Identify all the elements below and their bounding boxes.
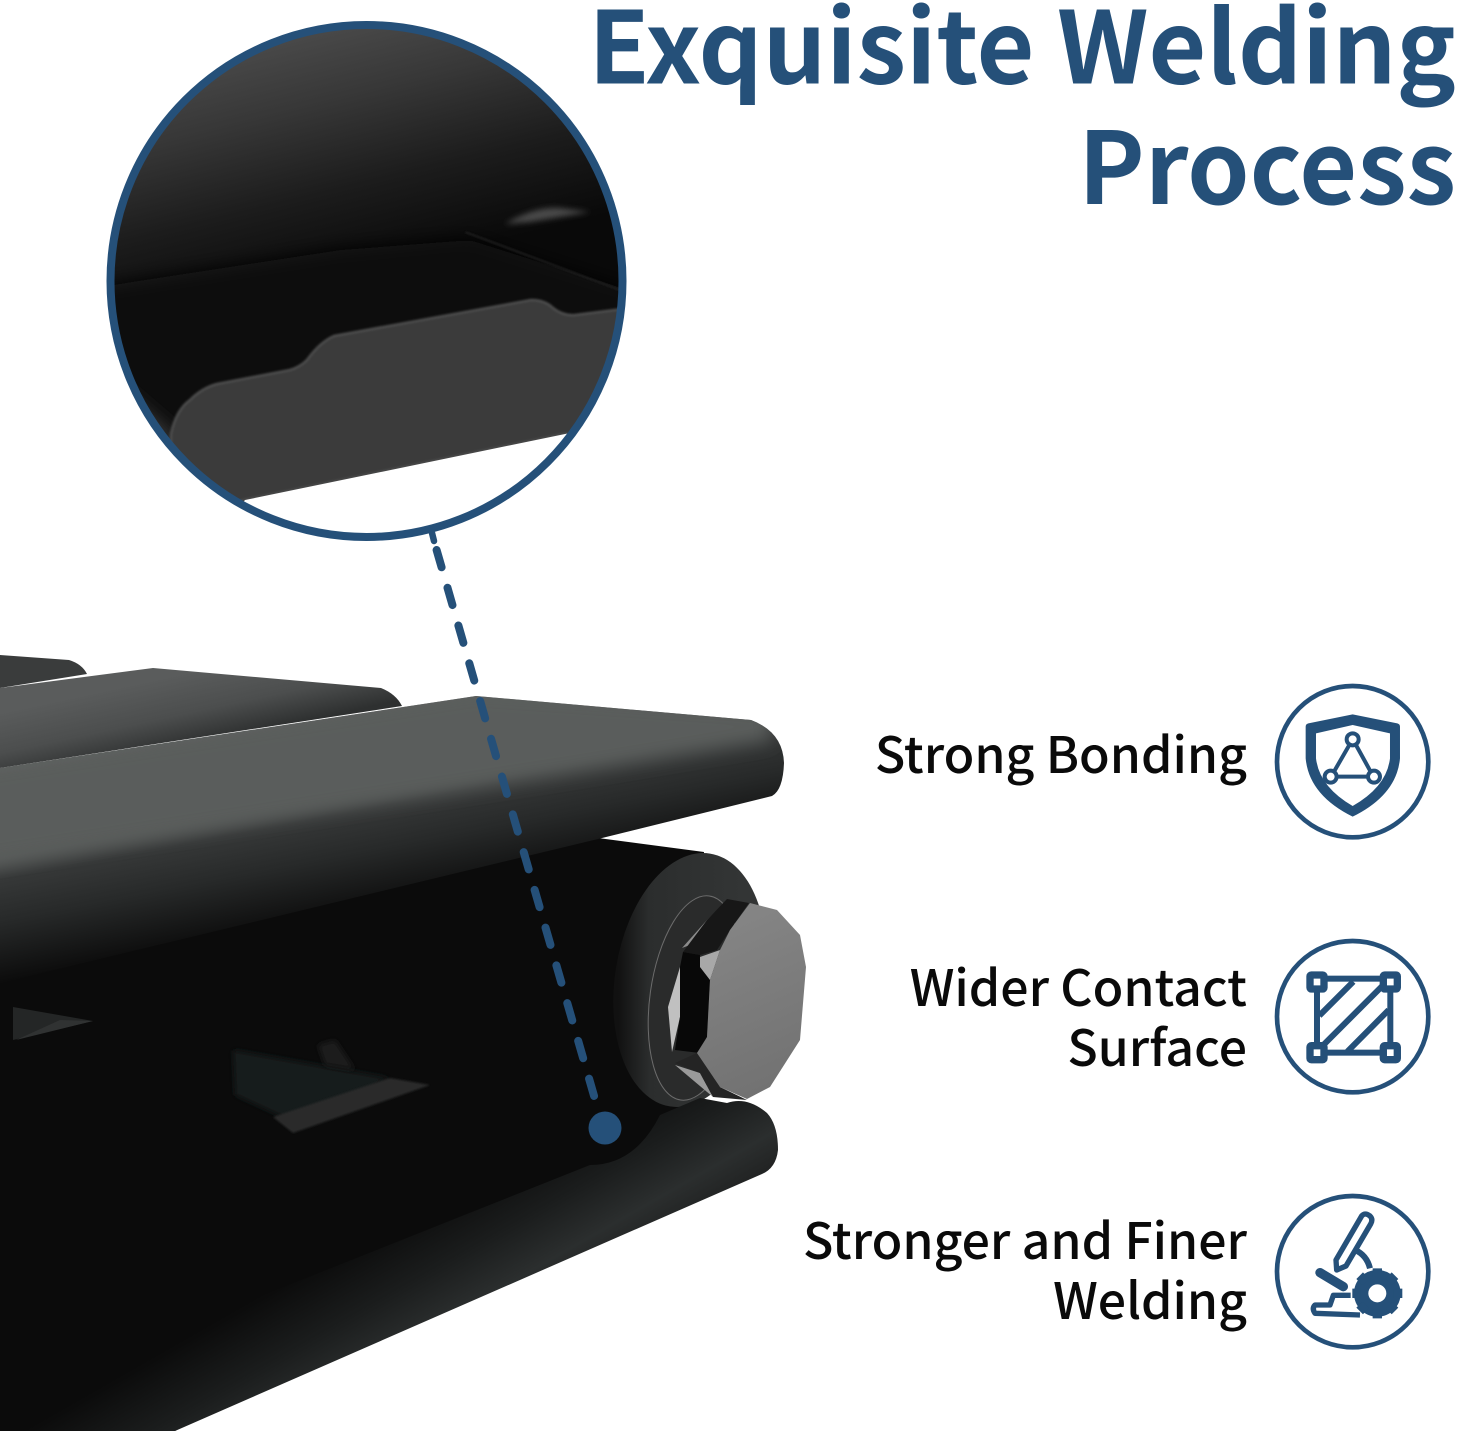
- icon: welding torch and gear: [1277, 1196, 1428, 1347]
- crescents: [682, 900, 727, 948]
- feature: strong bonding: [875, 686, 1428, 837]
- radiator body: [0, 838, 704, 1431]
- feature: strong bonding: Strong Bonding: [875, 716, 1247, 788]
- end cap flange: [596, 842, 784, 1118]
- body slots: [13, 1007, 430, 1133]
- bottom plate: [0, 1098, 778, 1431]
- title: [588, 0, 1456, 233]
- collar: [683, 899, 749, 955]
- socket: [675, 952, 710, 1053]
- dashed leader line: [437, 550, 596, 1101]
- feature: stronger and finer welding: Welding: [1053, 1262, 1247, 1334]
- leader stub at circle: [432, 533, 434, 541]
- feature: wider contact surface: Surface: [1067, 1009, 1247, 1081]
- icon: hatched square: [1277, 941, 1428, 1092]
- feature: stronger and finer welding: Stronger and Finer: [803, 1202, 1248, 1274]
- feature: stronger and finer welding: [803, 1196, 1428, 1347]
- icon: shield with triangle: [1277, 686, 1428, 837]
- radiator product: [0, 655, 806, 1431]
- feature: wider contact surface: [910, 941, 1428, 1092]
- magnified weld detail circle: [106, 21, 626, 541]
- top panel highlight: [2, 696, 776, 848]
- feature: wider contact surface: Wider Contact: [910, 949, 1247, 1021]
- hex nut: [697, 903, 806, 1099]
- leader end dot: [588, 1112, 622, 1144]
- top front panel: [0, 696, 784, 983]
- rear panels: [0, 655, 402, 768]
- title: Process: [1078, 88, 1456, 233]
